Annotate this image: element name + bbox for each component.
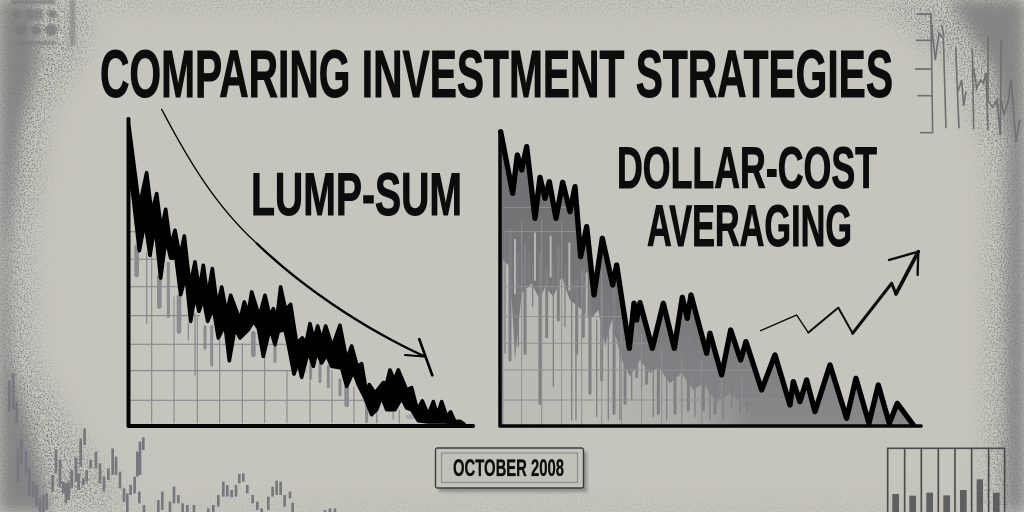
light gaps in filled area: [503, 260, 757, 425]
label: dollar-cost averaging: [617, 136, 877, 259]
grey streaks in filled area: [505, 230, 747, 420]
dollar-cost price line: [501, 132, 913, 425]
dollar-cost axes: [500, 132, 921, 426]
lump-sum price line: [128, 121, 464, 424]
grey spikes under lump-sum line: [137, 247, 417, 423]
label: dollar-cost averaging: AVERAGING: [647, 194, 852, 259]
date badge: OCTOBER 2008: [453, 455, 564, 482]
grid: dollar-cost averaging: [503, 207, 790, 425]
lump-sum trend arrow: [162, 109, 432, 375]
lump-sum axes: [128, 119, 473, 426]
grid: lump-sum chart: [130, 232, 399, 423]
rising trend arrow: [761, 252, 918, 333]
icon cluster: top-left faded symbols: [11, 0, 75, 46]
label: lump-sum: LUMP-SUM: [251, 161, 462, 228]
decorative chart: top-right faint line chart: [915, 14, 1020, 142]
date badge: [436, 448, 587, 492]
panel: lump-sum chart: [128, 109, 473, 426]
filled area: dollar-cost averaging: [501, 132, 913, 425]
decorative chart: bottom-left faint candlestick line: [9, 373, 335, 512]
panel: dollar-cost averaging chart: [500, 132, 921, 426]
decorative chart: bottom-right bar chart: [888, 448, 1005, 512]
